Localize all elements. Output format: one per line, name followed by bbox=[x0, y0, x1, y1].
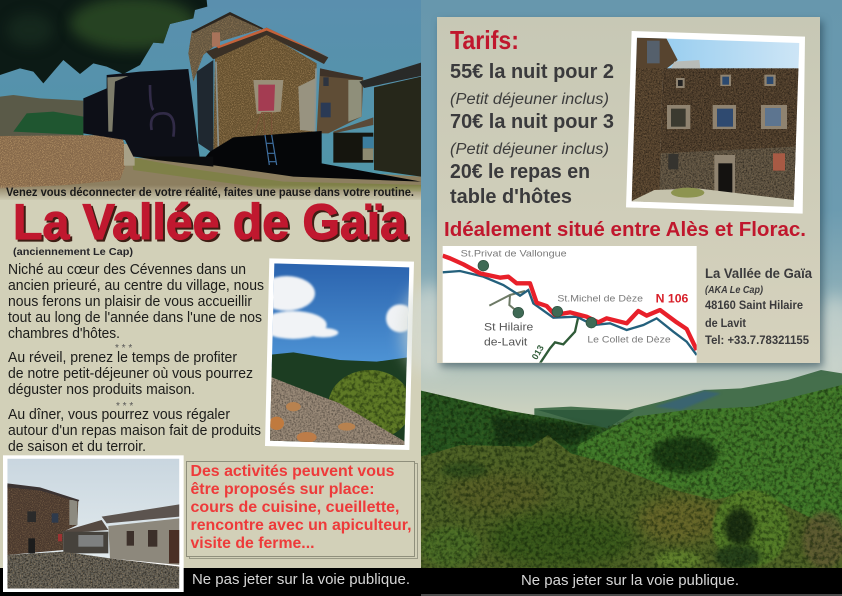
intro text: chambres d'hôtes. bbox=[8, 326, 120, 342]
price list: 70€ la nuit pour 3 bbox=[450, 111, 614, 133]
activities box: visite de ferme... bbox=[190, 535, 314, 552]
beige background bbox=[0, 180, 421, 596]
activities box: rencontre avec un apiculteur, bbox=[190, 517, 412, 534]
disposal notice right: Ne pas jeter sur la voie publique. bbox=[521, 572, 739, 589]
landscape photo bbox=[421, 370, 842, 569]
intro text: * * * bbox=[115, 343, 132, 354]
bottom strip left bbox=[0, 568, 421, 596]
place markers bbox=[478, 260, 597, 328]
road map: 013 bbox=[530, 343, 546, 361]
grey side road bbox=[489, 291, 525, 312]
contact details: 48160 Saint Hilaire bbox=[705, 298, 803, 312]
intro text: nous ferons un plaisir de vous accueillir bbox=[8, 294, 252, 310]
contact details: (AKA Le Cap) bbox=[705, 285, 764, 296]
road map: St.Privat de Vallongue bbox=[461, 249, 567, 259]
contact details bbox=[705, 265, 812, 347]
road map: Le Collet de Dèze bbox=[587, 334, 671, 344]
road map: N 106 bbox=[656, 292, 689, 306]
road map: St.Michel de Dèze bbox=[557, 294, 643, 304]
intro text: ancien prieuré, au centre du village, nous bbox=[8, 278, 264, 294]
price list: table d'hôtes bbox=[450, 186, 572, 208]
activities box: cours de cuisine, cueillette, bbox=[190, 499, 400, 516]
activities box: être proposés sur place: bbox=[190, 481, 374, 498]
intro text: autour d'un repas maison fait de produits bbox=[8, 423, 261, 439]
title: La Vallée de Gaïa bbox=[13, 194, 408, 250]
road map: de-Lavit bbox=[484, 336, 527, 348]
panel background bbox=[437, 17, 820, 363]
price list: 20€ le repas en bbox=[450, 161, 590, 183]
price list bbox=[450, 61, 614, 208]
bottom strip right bbox=[421, 568, 842, 594]
price list: 55€ la nuit pour 2 bbox=[450, 61, 614, 83]
red road bbox=[443, 256, 697, 350]
intro text: * * * bbox=[116, 401, 133, 412]
intro text: Au dîner, vous pourrez vous régaler bbox=[8, 407, 230, 423]
activities box: Des activités peuvent vous bbox=[190, 463, 395, 480]
photo: sky and slate roof bbox=[258, 258, 414, 450]
intro text: Niché au cœur des Cévennes dans un bbox=[8, 262, 246, 278]
green road 013 bbox=[540, 317, 587, 363]
blue river bbox=[443, 271, 697, 355]
contact details: Tel: +33.7.78321155 bbox=[705, 333, 809, 347]
price list: (Petit déjeuner inclus) bbox=[450, 91, 609, 108]
info panel bbox=[437, 17, 820, 363]
right page background bbox=[402, 0, 842, 420]
activities box bbox=[186, 462, 418, 558]
intro text bbox=[8, 262, 264, 455]
road map: St Hilaire bbox=[484, 322, 533, 334]
bottom edge line bbox=[421, 594, 842, 596]
intro text: tout au long de l'année dans l'une de nos bbox=[8, 310, 262, 326]
contact details: La Vallée de Gaïa bbox=[705, 265, 812, 281]
left page bbox=[0, 0, 421, 596]
price list: (Petit déjeuner inclus) bbox=[450, 141, 609, 158]
photo frame: courtyard bbox=[3, 455, 184, 592]
subtitle: (anciennement Le Cap) bbox=[13, 247, 133, 258]
tagline: Venez vous déconnecter de votre réalité, faites une pause dans votre routine. bbox=[6, 185, 414, 199]
location heading: Idéalement situé entre Alès et Florac. bbox=[444, 219, 806, 241]
intro text: Au réveil, prenez le temps de profiter bbox=[8, 350, 237, 366]
intro text: déguster nos produits maison. bbox=[8, 382, 195, 398]
disposal notice left: Ne pas jeter sur la voie publique. bbox=[192, 571, 410, 588]
photo: stone house facade bbox=[626, 31, 805, 214]
road map bbox=[443, 246, 697, 363]
contact details: de Lavit bbox=[705, 316, 746, 330]
tarifs heading: Tarifs: bbox=[450, 25, 519, 55]
intro text: de notre petit-déjeuner où vous pourrez bbox=[8, 366, 253, 382]
intro text: de saison et du terroir. bbox=[8, 439, 146, 455]
photo: stone priory and tree bbox=[0, 0, 421, 202]
